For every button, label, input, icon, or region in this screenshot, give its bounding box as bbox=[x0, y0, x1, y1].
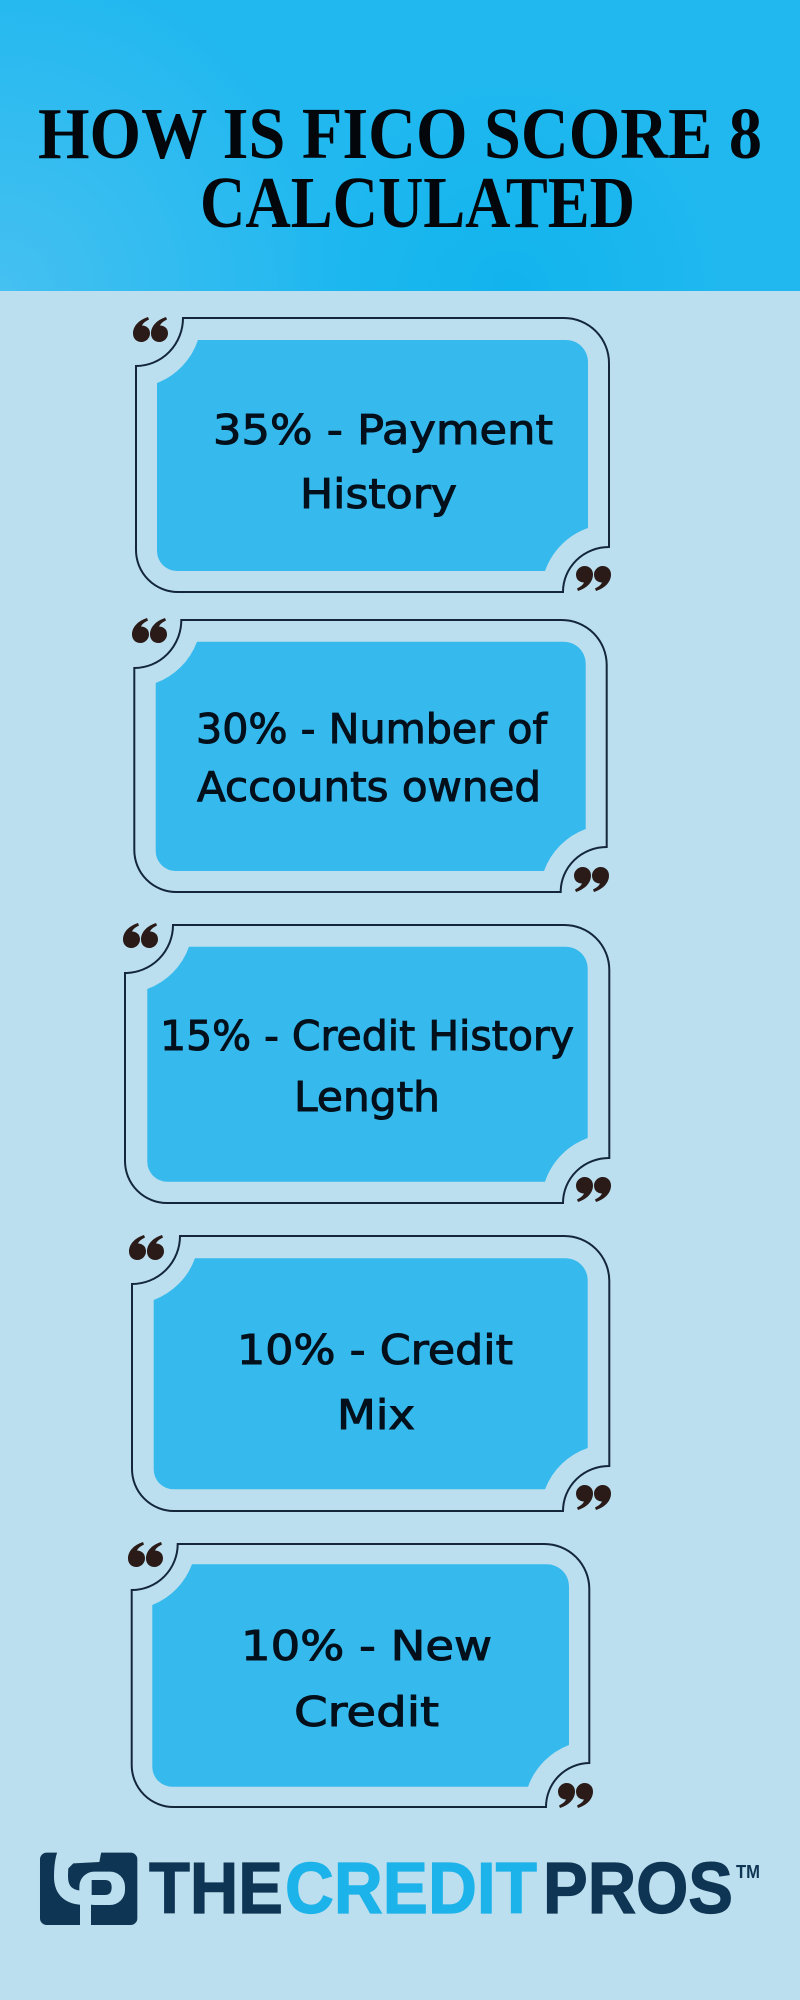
blue card bbox=[147, 947, 588, 1182]
blue card bbox=[157, 340, 588, 571]
panel: 10% new credit bbox=[128, 1542, 593, 1808]
icon: closing quote bbox=[576, 1177, 611, 1202]
wordmark: CREDIT bbox=[285, 1849, 537, 1929]
blue card bbox=[156, 642, 586, 871]
panel: 35% payment history bbox=[133, 317, 611, 592]
blue card bbox=[152, 1564, 569, 1787]
icon: opening quote bbox=[133, 317, 168, 342]
title bbox=[38, 93, 762, 243]
card text: Mix bbox=[337, 1391, 415, 1439]
panel: 15% credit history length bbox=[123, 923, 611, 1203]
icon: closing quote bbox=[576, 566, 611, 591]
icon: closing quote bbox=[574, 867, 609, 892]
frame bbox=[132, 1544, 589, 1807]
logo: The Credit Pros bbox=[40, 1849, 760, 1929]
icon: closing quote bbox=[558, 1783, 593, 1808]
title: CALCULATED bbox=[200, 162, 635, 243]
frame bbox=[134, 620, 607, 892]
card text bbox=[213, 406, 553, 518]
card text: Accounts owned bbox=[197, 763, 541, 811]
frame bbox=[132, 1236, 609, 1511]
wordmark: PROS bbox=[543, 1849, 733, 1929]
icon: opening quote bbox=[128, 1542, 163, 1567]
card text bbox=[237, 1326, 513, 1439]
blue card bbox=[154, 1258, 588, 1489]
wordmark: TM bbox=[736, 1862, 760, 1882]
card text bbox=[196, 705, 549, 811]
card text: 35% - Payment bbox=[213, 406, 553, 454]
wordmark bbox=[149, 1849, 760, 1929]
card text bbox=[241, 1622, 492, 1736]
panel: 10% credit mix bbox=[129, 1235, 611, 1511]
card text: 10% - New bbox=[241, 1622, 492, 1670]
icon: logo mark bbox=[40, 1850, 137, 1928]
frame bbox=[136, 318, 609, 592]
card text: Credit bbox=[294, 1688, 439, 1736]
card text: 10% - Credit bbox=[237, 1326, 513, 1374]
card text: 15% - Credit History bbox=[160, 1012, 574, 1060]
card text: Length bbox=[294, 1073, 440, 1121]
card text: 30% - Number of bbox=[196, 705, 549, 753]
card text bbox=[160, 1012, 574, 1121]
icon: closing quote bbox=[576, 1485, 611, 1510]
card text: History bbox=[300, 470, 457, 518]
header banner bbox=[0, 0, 800, 291]
icon: opening quote bbox=[123, 923, 158, 948]
icon: opening quote bbox=[132, 618, 167, 643]
wordmark: THE bbox=[149, 1849, 283, 1929]
panel: 30% number of accounts owned bbox=[132, 618, 609, 892]
icon: opening quote bbox=[129, 1235, 164, 1260]
frame bbox=[125, 925, 609, 1203]
